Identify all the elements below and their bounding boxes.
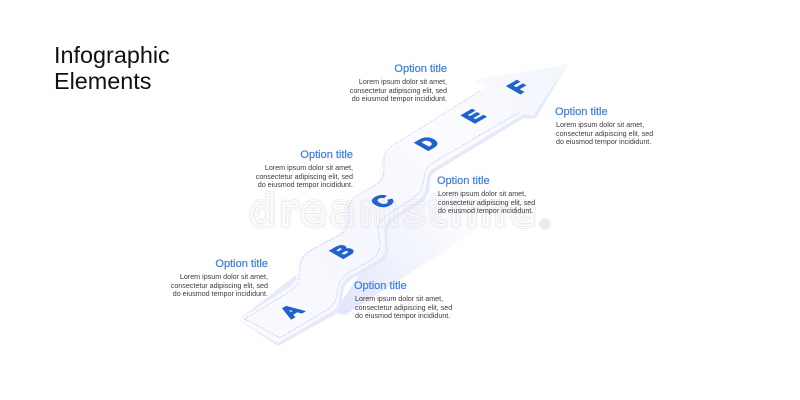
option block: middle right: do eiusmod tempor incididunt. [438,207,533,215]
letter A: A [274,301,309,321]
option block: right of arrowhead: do eiusmod tempor incididunt. [556,138,651,146]
letter D: D [410,133,445,153]
option block: top centre [350,63,447,103]
option block: top centre: Option title [394,63,447,75]
option block: right of arrowhead: Option title [555,106,608,118]
option block: top centre: do eiusmod tempor incididunt. [352,95,447,103]
option block: middle left [256,149,353,189]
option block: top centre: consectetur adipiscing elit, sed [350,87,447,95]
option block: middle right [437,175,535,215]
option block: right of arrowhead: consectetur adipiscing elit, sed [556,130,653,138]
option block: bottom left: Option title [215,258,268,270]
title: Elements [54,68,152,94]
title: Infographic [54,42,170,68]
option block: bottom centre: consectetur adipiscing elit, sed [355,304,452,312]
arrow cast shadow [335,167,560,315]
option block: top centre: Lorem ipsum dolor sit amet, [359,78,447,86]
dotted inner outline left [245,91,480,319]
isometric arrow diagram [239,64,568,346]
option block: middle left: Lorem ipsum dolor sit amet, [265,164,353,172]
option block: middle left: do eiusmod tempor incididunt. [258,181,353,189]
option block: bottom left: consectetur adipiscing elit, sed [171,282,268,290]
option block: right of arrowhead: Lorem ipsum dolor sit amet, [556,121,644,129]
option block: bottom left: Lorem ipsum dolor sit amet, [180,273,268,281]
option block: bottom left: do eiusmod tempor incididunt. [173,290,268,298]
option block: bottom centre [354,280,452,320]
arrow side edge [238,64,568,346]
option block: middle right: consectetur adipiscing elit, sed [438,199,535,207]
option block: right of arrowhead [555,106,653,146]
letter F: F [502,78,535,97]
watermark [249,191,551,230]
letter E: E [456,106,491,126]
option block: bottom left [171,258,268,298]
option block: middle left: Option title [300,149,353,161]
option block: bottom centre: do eiusmod tempor incididunt. [355,312,450,320]
arrow top face [238,64,568,343]
option block: middle right: Lorem ipsum dolor sit amet, [438,190,526,198]
option block: middle left: consectetur adipiscing elit, sed [256,173,353,181]
dotted inner outline [245,112,520,338]
option block: middle right: Option title [437,175,490,187]
letter B: B [325,241,360,261]
title [54,42,170,94]
letter C: C [365,191,400,211]
option block: bottom centre: Lorem ipsum dolor sit amet, [355,295,443,303]
option block: bottom centre: Option title [354,280,407,292]
